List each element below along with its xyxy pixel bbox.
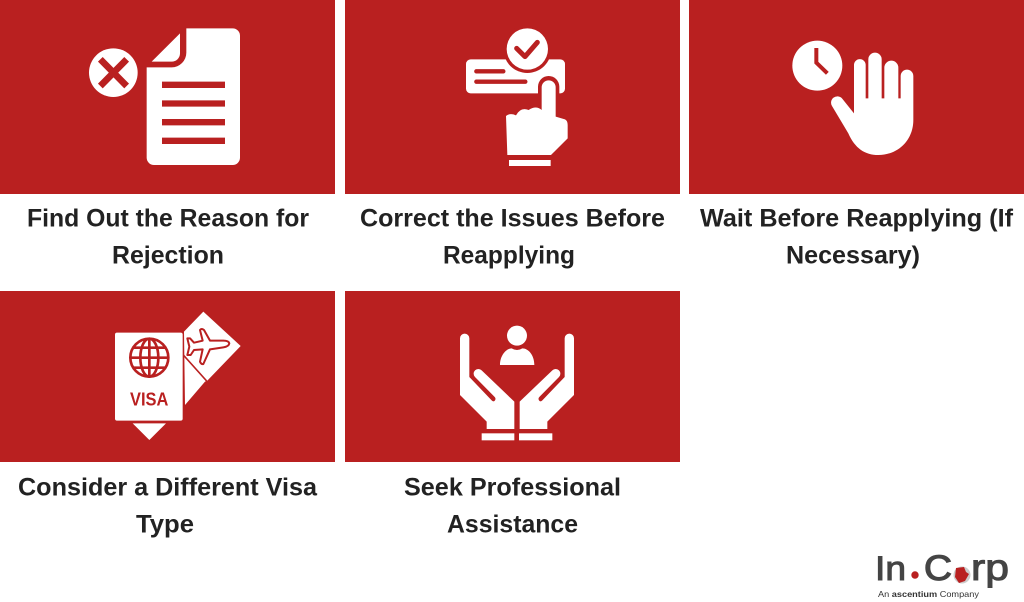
logo: InCorp: In <box>875 550 906 588</box>
panel: seek professional assistance <box>345 291 680 538</box>
heading: Correct the Issues Before <box>360 204 665 232</box>
icon: clock and raised hand <box>792 41 913 155</box>
logo: InCorp: rp <box>971 547 1009 588</box>
panel background <box>345 0 680 194</box>
heading <box>18 474 318 538</box>
heading: Find Out the Reason for <box>27 204 309 232</box>
heading <box>360 204 665 270</box>
heading: Rejection <box>112 242 224 270</box>
logo: InCorp: C <box>924 549 952 588</box>
heading: Type <box>136 510 194 538</box>
heading: Necessary) <box>786 242 920 270</box>
panel background <box>0 0 335 194</box>
logo: InCorp <box>875 547 1009 599</box>
heading: Consider a Different Visa <box>18 474 318 502</box>
panel: find out the reason <box>0 0 335 270</box>
panel: consider a different visa <box>0 291 335 538</box>
icon: hand pressing check button <box>466 25 568 166</box>
icon: rejected document <box>89 28 240 165</box>
heading: Reapplying <box>443 242 575 270</box>
icon: passport and ticket: VISA <box>130 389 168 410</box>
heading: Assistance <box>447 510 578 538</box>
panel background <box>689 0 1024 194</box>
panel: correct the issues <box>345 0 680 270</box>
logo: InCorp: An ascentium Company <box>878 589 980 599</box>
heading <box>27 204 309 270</box>
heading: Seek Professional <box>404 474 621 502</box>
icon: hands holding person <box>460 326 574 440</box>
panel: wait before reapplying <box>689 0 1024 270</box>
heading <box>404 474 621 538</box>
panel background <box>345 291 680 462</box>
icon: passport and ticket <box>115 312 241 440</box>
heading <box>700 204 1014 270</box>
panel background <box>0 291 335 462</box>
heading: Wait Before Reapplying (If <box>700 204 1014 232</box>
